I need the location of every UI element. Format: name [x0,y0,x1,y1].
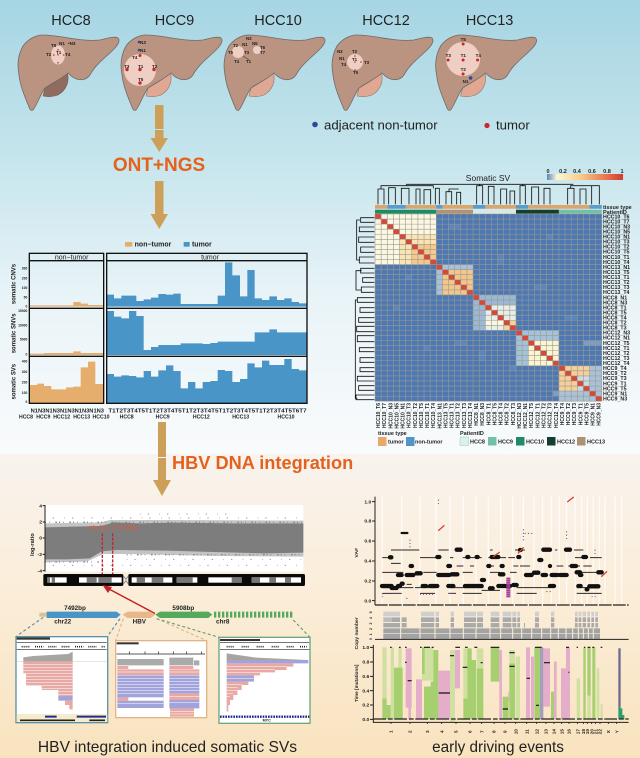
y axis ticks: 400 [22,360,27,364]
heatmap colour bar [546,169,624,180]
y axis titles: somatic CNVs [11,263,17,304]
arrow: livers to sequencing [150,105,168,152]
heatmap row labels: HCC9_T5 [603,386,627,392]
sparse points [407,500,595,598]
chromosome labels: Y [614,729,619,733]
liver: HCC12: T2 [352,49,358,54]
chr8 segment: chr8 [216,619,230,626]
heatmap row labels: HCC12_T1 [603,346,630,352]
read pileup: chr22 [16,637,108,723]
chromosome labels: 13 [544,729,549,734]
heatmap column labels: HCC9_N1 [590,403,596,426]
y axis ticks: 100 [22,286,27,290]
chromosome labels: 8 [492,730,497,733]
heatmap column labels: HCC9_T5 [584,403,590,425]
heatmap row labels: HCC13_N1 [603,265,630,271]
heatmap legend: non-tumor [415,440,443,446]
heatmap row labels: HCC12_T2 [603,351,630,357]
heatmap row labels: HCC9_T2 [603,371,627,377]
chromosome labels [389,729,619,734]
y axis ticks: 0 [25,304,27,308]
heatmap row labels: HCC13_T4 [603,290,630,296]
y axis ticks: 300 [22,370,27,374]
liver: HCC9 [121,13,222,110]
y axis ticks: 15000 [18,309,27,313]
arrow: integration site to chromosome [102,585,155,614]
heatmap column labels: HCC8_T2 [505,403,511,425]
mutation timing plot: 0.4 [362,688,370,694]
sample labels: T1T2T3T4T5T1T2T3T4T5T1T2T3T4T5T1T2T3T4T5T1T2T3T4T5T6T7 [108,408,307,414]
liver: HCC9: T1 [138,64,144,69]
green clonal bars [382,647,595,719]
chr22 segment: chr22 [54,619,72,626]
liver: HCC8 [18,13,119,110]
chromosome labels: 18 [581,729,586,734]
heatmap row labels: HCC8_N1 [603,295,627,301]
copy number plot: Copy number [354,617,360,649]
heatmap legend: HCC9 [498,440,513,446]
chromosome labels: 19 [585,729,590,734]
mutation timing plot: 0.2 [362,703,370,709]
heatmap column labels: HCC8_T3 [511,403,517,425]
heatmap column labels: HCC13_N1 [437,403,443,429]
heatmap row labels: HCC10_N5 [603,230,630,236]
arrow: sequencing to results [150,181,168,229]
liver: HCC9: N1 [140,48,146,53]
heatmap row labels: HCC10_T1 [603,255,630,261]
copy number plot: 0 [369,638,373,640]
patient labels: HCC13 [73,415,90,421]
bar chart legend: non−tumor [135,242,172,249]
heatmap row labels: HCC10_N3 [603,224,630,230]
liver: HCC8: T1 [56,50,62,55]
y axis ticks: 300 [22,267,27,271]
liver: HCC10: HCC10 [254,13,302,29]
annotation bars: tissue type [603,205,632,211]
heatmap: somatic SV similarity [355,169,632,446]
axes [372,497,375,605]
liver: HCC10: T7 [260,50,266,55]
heatmap colour bar: 1 [620,169,624,175]
heatmap row labels: HCC10_T2 [603,245,630,251]
heatmap legend: HCC10 [526,440,544,446]
legend: tissue dots: tumor [496,118,530,132]
heatmap column labels: HCC8_T5 [492,403,498,425]
liver: HCC13: N1 [463,79,469,84]
liver: HCC8: HCC8 [51,13,91,29]
chromosome labels: 10 [513,729,518,734]
facet strip labels [55,254,220,261]
liver: HCC12: T5 [353,70,359,75]
liver: HCC13: HCC13 [466,13,513,29]
heatmap legend: tissue type [378,431,407,437]
heatmap column labels [376,403,603,429]
heatmap row labels: HCC8_T3 [603,326,627,332]
liver: HCC10: N1 [242,42,248,47]
y axis: 2 [39,520,42,526]
liver: HCC13: T2 [461,67,466,72]
liver: HCC10 [224,13,325,110]
liver: HCC9: T5 [138,77,144,82]
copy ratio scatter plot [30,503,305,586]
heatmap column labels: HCC10_T4 [431,403,437,428]
chr8 segment [155,605,294,626]
y axis ticks: 200 [22,276,27,280]
thin clonal clusters [382,550,603,593]
heatmap row labels: HCC9_T1 [603,381,627,387]
VAF scatter plot: 1.0 [364,499,372,505]
y axis ticks: 10000 [18,323,27,327]
chromosome labels: X [606,729,611,733]
chromosome labels: 1 [389,730,394,733]
heatmap row labels: HCC10_N1 [603,234,630,240]
chromosome labels: 4 [439,730,444,733]
y axis: 4 [39,503,42,509]
heatmap colour bar: 0.2 [559,169,567,175]
region label: chr22: 3.4Mbp [88,524,139,531]
liver: HCC12: N1 [339,56,345,61]
patient labels: HCC8 [120,415,134,421]
heatmap column labels: HCC10_N3 [388,403,394,429]
zoom guide lines [17,617,310,641]
heatmap row labels: HCC9_N1 [603,391,627,397]
y axis ticks: 5000 [20,338,27,342]
facet strip labels: tumor [201,254,220,261]
caption: HBV integration induced somatic SVs: HBV integration induced somatic SVs [38,739,297,756]
read pileup: chr8: MYC [263,718,271,722]
subclonal purple cluster [502,578,514,598]
patient labels: HCC10 [278,415,295,421]
heatmap row labels: HCC9_T4 [603,366,627,372]
facet strip labels: non−tumor [55,254,89,261]
VAF scatter plot: 0.2 [364,579,372,585]
heading: HBV DNA integration: HBV DNA integration [172,453,353,473]
liver: HCC10: N5 [252,41,258,46]
chr22 segment [39,605,121,626]
mutation timing plot: 0.6 [362,674,370,680]
patient labels: HCC13 [232,415,249,421]
liver: HCC8: T5 [51,43,57,48]
legend: tissue dots [312,118,530,132]
heatmap column labels: HCC13_T2 [456,403,462,428]
chromosome labels: 9 [503,730,508,733]
copy number plot: 4 [369,616,373,619]
patient labels [19,415,295,421]
tumor bars [107,262,307,403]
heatmap legend: PatientID [460,431,484,437]
liver: HCC10: T3 [244,50,250,55]
liver: HCC12: T4 [341,62,347,67]
chromosome labels: 20 [589,729,594,734]
page background: blue upper section [0,0,640,454]
liver: HCC13 [436,13,537,110]
chromosome labels: 6 [468,730,473,733]
heatmap row labels: HCC13_T2 [603,280,630,286]
pink subclonal bars [406,647,570,719]
heatmap column labels: HCC9_T4 [560,403,566,425]
heatmap row labels: HCC8_T4 [603,316,627,322]
heatmap column labels: HCC8_T4 [499,403,505,425]
y axis: -4 [38,568,42,574]
chromosome labels: 11 [524,729,529,734]
heatmap row labels: HCC9_T3 [603,376,627,382]
patient labels: HCC12 [193,415,210,421]
heatmap column labels: HCC13_T4 [468,403,474,428]
copy number plot: 1 [369,633,373,635]
HBV segment [123,612,155,626]
read pileup: HBV [116,641,207,718]
y axis ticks: 50 [24,296,27,300]
VAF scatter plot: 0.4 [364,559,372,565]
mutation timing plot: 0.8 [362,660,370,666]
chromosome labels: 15 [559,729,564,734]
chromosome labels: 7 [479,730,484,733]
heatmap column labels: HCC12_T2 [542,403,548,428]
heatmap column labels: HCC10_T6 [376,403,382,428]
liver: HCC10: T2 [233,43,239,48]
heatmap column labels: HCC12_T5 [529,403,535,428]
y axis ticks: 0 [25,352,27,356]
liver: HCC12: T3 [364,60,370,65]
heatmap column labels: HCC12_T1 [535,403,541,428]
heatmap column labels: HCC9_T3 [572,403,578,425]
VAF scatter plot: 0.6 [364,539,372,545]
heatmap column labels: HCC10_T3 [407,403,413,428]
mutation timing plot [354,645,629,734]
y axis titles: somatic SVs [11,363,17,399]
chromosome labels: 2 [408,730,413,733]
y axis ticks: 0 [25,400,27,404]
chromosome labels: 21 [593,729,598,734]
heatmap column labels: HCC12_T4 [554,403,560,428]
liver: HCC8: •N3 [68,41,76,46]
heatmap row labels: HCC13_T3 [603,285,630,291]
patient labels: HCC9 [36,415,50,421]
heatmap row labels: HCC12_T4 [603,361,630,367]
y axis titles: somatic SNVs [11,313,17,353]
mutation timing plot: Time [mutations] [354,664,359,702]
annotation bars [375,205,632,216]
liver: HCC12: N3 [337,49,343,54]
chromosome labels: 3 [425,730,430,733]
heatmap colour bar: 0.8 [603,169,611,175]
chromosome labels: 22 [598,729,603,734]
timing estimate ticks [390,647,602,709]
y axis titles [11,263,17,399]
region markers [102,533,113,585]
copy number plot: 5 [369,611,373,613]
liver: HCC13: T4 [476,53,481,58]
liver: HCC9: HCC9 [155,13,194,29]
heatmap column labels: HCC13_T1 [450,403,456,428]
y axis: 0 [39,536,42,542]
liver: HCC8: T4 [65,52,71,57]
y axis ticks: 200 [22,381,27,385]
liver: HCC10: N3 [246,36,252,41]
bar chart legend [125,242,212,249]
heatmap row labels: HCC13_T5 [603,270,630,276]
heatmap column labels: HCC8_N3 [480,403,486,426]
bar chart legend: tumor [192,242,212,249]
heatmap column labels: HCC8_N1 [474,403,480,426]
heatmap row labels: HCC10_T4 [603,260,630,266]
heatmap row labels: HCC10_T3 [603,240,630,246]
heatmap colour bar: 0.4 [573,169,582,175]
VAF scatter plot [354,497,629,605]
chromosome labels: 14 [552,729,557,734]
liver: HCC12: HCC12 [362,13,410,29]
y axis: log-ratio [30,533,36,556]
patient labels: HCC9 [156,415,170,421]
VAF scatter plot: VAF [354,548,360,557]
y axis [30,503,45,574]
heatmap column labels: HCC8_T1 [486,403,492,425]
heatmap row labels: HCC10_T7 [603,219,630,225]
heatmap row labels: HCC12_T5 [603,341,630,347]
chr8 segment: 5908bp [172,605,194,612]
copy number plot [354,611,629,649]
heatmap colour bar: 0 [546,169,550,175]
liver: HCC13: T1 [461,53,466,58]
patient labels: HCC12 [53,415,70,421]
heatmap column labels: HCC10_T1 [425,403,431,428]
left dendrogram [355,218,374,400]
heatmap column labels: HCC10_N1 [400,403,406,429]
liver: HCC13: T3 [446,53,451,58]
heatmap row labels: HCC10_T5 [603,250,630,256]
heatmap legend: tumor [388,440,404,446]
driver mutation markers [439,497,607,576]
patient labels: HCC8 [19,415,33,421]
chromosome labels: 12 [534,729,539,734]
heatmap row labels: HCC12_N3 [603,331,630,337]
mutation timing plot: 0.0 [362,717,370,723]
liver: HCC12: T1 [352,57,358,62]
heatmap column labels: HCC9_T2 [566,403,572,425]
non-tumor bars [30,302,103,403]
heatmap column labels: HCC9_T1 [578,403,584,425]
heatmap column labels: HCC10_T5 [419,403,425,428]
heatmap legend [378,431,605,446]
y axis ticks [18,267,27,404]
heatmap column labels: HCC12_T3 [548,403,554,428]
pale clonal bars [382,647,603,722]
liver: HCC10: T5 [228,50,234,55]
heatmap legend: HCC8 [470,440,485,446]
chromosome labels: 17 [575,729,580,734]
heatmap row labels: HCC12_T3 [603,356,630,362]
heatmap column labels: HCC10_N5 [394,403,400,429]
mutation timing plot: 1.0 [362,645,370,651]
liver: HCC10: T4 [234,59,240,64]
chr22 segment: 7492bp [64,605,86,612]
heatmap row labels: HCC8_T5 [603,310,627,316]
sample labels [31,408,307,414]
copy number plot: 3 [369,623,373,625]
y axis: -2 [38,552,42,558]
read pileup: chr8 [219,637,310,723]
liver: HCC9: N3 [140,40,146,45]
page background: cream lower section [0,454,640,758]
liver: HCC10: T6 [260,45,266,50]
bar chart: somatic variants [11,242,307,421]
thick clusters [382,550,602,589]
heatmap colour bar: 0.6 [588,169,596,175]
liver: HCC9: T4 [132,55,138,60]
heading: ONT+NGS: ONT+NGS [113,155,205,176]
heatmap column labels: HCC10_T7 [382,403,388,428]
heatmap row labels: HCC9_N3 [603,396,627,402]
VAF scatter plot: 0.0 [364,598,372,604]
heatmap row labels: HCC13_T1 [603,275,630,281]
arrow: results to integration analysis [153,422,171,496]
liver: HCC9: T2 [152,64,158,69]
liver: HCC8: T2 [46,52,52,57]
heatmap row labels: HCC12_N1 [603,336,630,342]
heatmap legend: HCC13 [587,440,605,446]
grey-purple bars [540,647,543,719]
chromosome ideogram [43,574,305,586]
heatmap column labels: HCC12_N3 [517,403,523,429]
heatmap column labels: HCC13_T5 [443,403,449,428]
heatmap column labels: HCC13_T3 [462,403,468,428]
liver: HCC12 [332,13,433,110]
heatmap row labels: HCC8_N3 [603,300,627,306]
heatmap column labels: HCC9_N3 [597,403,603,426]
VAF scatter plot: 0.8 [364,519,372,525]
heatmap legend: HCC12 [557,440,575,446]
y axis ticks: 100 [22,391,27,395]
heatmap column labels: HCC10_T2 [413,403,419,428]
integration junction diagram [16,605,310,723]
heatmap row labels [603,214,630,402]
patient labels: HCC10 [93,415,110,421]
chromosome labels: 5 [454,730,459,733]
chromosome labels: 16 [567,729,572,734]
liver: HCC9: T3 [124,64,130,69]
chart frames [29,253,307,403]
heatmap cells [375,214,602,401]
heatmap column labels: HCC12_N1 [523,403,529,429]
axes [370,645,629,722]
HBV segment: HBV [133,619,147,626]
heatmap row labels: HCC10_T6 [603,214,630,220]
sample labels: N1N3N1N3N1N3N1N3N1N3 [31,408,104,414]
legend: tissue dots: adjacent non-tumor [324,118,438,132]
caption: early driving events: early driving events [432,739,564,756]
annotation bars: PatientID [603,210,627,216]
top dendrogram [378,184,599,204]
heatmap title: Somatic SV [466,173,511,183]
copy number plot: 2 [369,628,373,630]
heatmap row labels: HCC8_T1 [603,305,627,311]
liver: HCC10: T1 [246,59,252,64]
liver: HCC8: N1 [59,41,65,46]
heatmap row labels: HCC8_T2 [603,321,627,327]
liver: HCC13: T5 [461,37,466,42]
